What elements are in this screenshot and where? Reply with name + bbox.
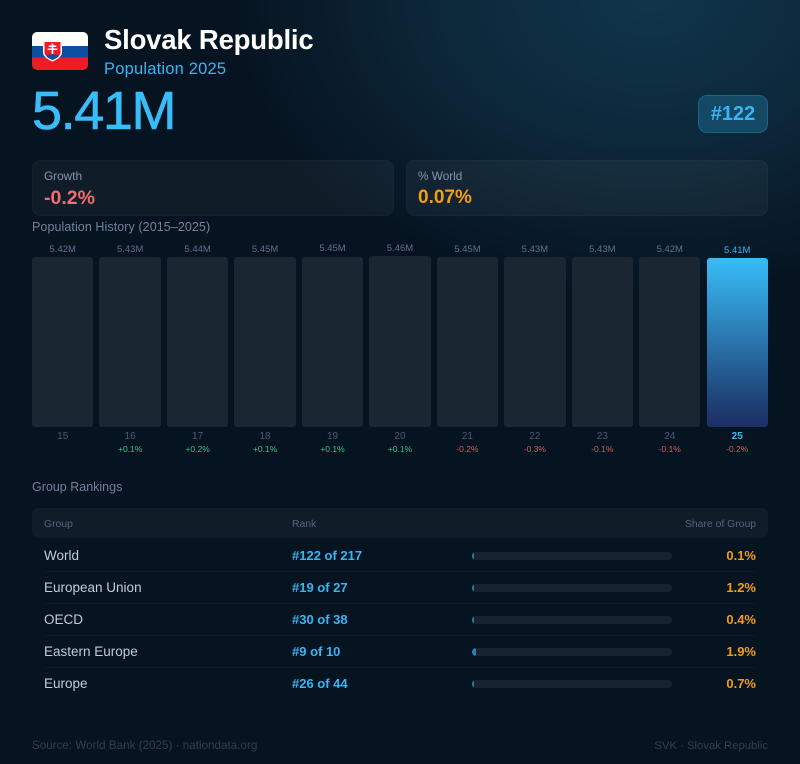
- bar 2019: [302, 243, 363, 454]
- bar 2018: +0.1%: [253, 444, 277, 454]
- bar 2025 highlighted: 5.41M: [724, 245, 750, 256]
- bar 2024: -0.1%: [659, 444, 681, 454]
- bar 2017: +0.2%: [185, 444, 210, 454]
- row: European Union: 1.2%: [726, 580, 756, 595]
- bar 2018: [234, 244, 296, 454]
- bar 2023: 5.43M: [589, 244, 616, 255]
- bar 2016: 5.43M: [117, 244, 143, 255]
- row: European Union: #19 of 27: [292, 580, 348, 595]
- title: Slovak Republic: [104, 24, 313, 55]
- bar 2020: 5.46M: [387, 243, 413, 254]
- source footer: Source: World Bank (2025) · nationdata.org: [32, 739, 257, 752]
- headline population value: 5.41M: [32, 81, 175, 141]
- header: rank: Rank: [292, 519, 316, 530]
- row: Europe: Europe: [44, 676, 88, 691]
- row: OECD: OECD: [44, 612, 83, 627]
- bar 2022: -0.3%: [524, 444, 546, 454]
- bar 2023: 23: [597, 431, 608, 442]
- percent of world value: 0.07%: [418, 187, 472, 208]
- row: World: 0.1%: [726, 548, 756, 563]
- bar 2020: 20: [394, 431, 406, 442]
- bar 2016: 16: [125, 431, 136, 442]
- row: Eastern Europe: [44, 636, 756, 668]
- bar 2016: [99, 244, 161, 454]
- bar 2015: 5.42M: [50, 244, 76, 255]
- bar 2017: 5.44M: [184, 244, 211, 255]
- bar 2023: [572, 244, 633, 454]
- row: Eastern Europe: Eastern Europe: [44, 644, 138, 659]
- header: group: Group: [44, 519, 73, 530]
- bar 2021: 21: [462, 431, 473, 442]
- bar 2019: 5.45M: [319, 243, 346, 254]
- percent of world label: % World: [418, 169, 462, 183]
- bar 2023: -0.1%: [591, 444, 613, 454]
- row: OECD: #30 of 38: [292, 612, 348, 627]
- bar 2018: 18: [260, 431, 271, 442]
- bar 2022: 5.43M: [522, 244, 548, 255]
- bar 2025 highlighted: -0.2%: [726, 444, 748, 454]
- chart heading: Population History (2015–2025): [32, 220, 210, 234]
- bar 2024: [639, 244, 700, 454]
- table header: [32, 508, 768, 538]
- bar 2020: [369, 243, 431, 454]
- row: European Union: [44, 572, 756, 604]
- bar 2019: 19: [327, 431, 338, 442]
- header: share of group: Share of Group: [685, 519, 756, 530]
- row: Europe: [44, 676, 756, 691]
- rankings table: [32, 508, 768, 691]
- bar 2021: -0.2%: [456, 444, 479, 454]
- bar 2015: [32, 244, 93, 442]
- row: OECD: 0.4%: [726, 612, 756, 627]
- bar 2017: 17: [192, 431, 203, 442]
- flag: Slovakia: [32, 32, 88, 70]
- row: Europe: 0.7%: [726, 676, 756, 691]
- row: OECD: [44, 604, 756, 636]
- bar 2024: 24: [664, 431, 675, 442]
- bar 2021: 5.45M: [454, 244, 481, 255]
- bar 2021: [437, 244, 498, 454]
- bar 2022: 22: [529, 431, 540, 442]
- bar 2025 highlighted: [707, 245, 768, 454]
- growth label: Growth: [44, 169, 82, 183]
- panel: growth: [32, 160, 394, 216]
- row: European Union: European Union: [44, 580, 142, 595]
- row: Europe: #26 of 44: [292, 676, 348, 691]
- growth value: -0.2%: [44, 187, 95, 209]
- bar chart: population history: [32, 243, 768, 454]
- bar 2018: 5.45M: [252, 244, 278, 255]
- panel: percent of world: [406, 160, 768, 216]
- row: Eastern Europe: #9 of 10: [292, 644, 340, 659]
- bar 2019: +0.1%: [320, 444, 345, 454]
- world rank badge: #122: [711, 103, 755, 125]
- country code footer: SVK · Slovak Republic: [654, 740, 768, 752]
- row: World: #122 of 217: [292, 548, 362, 563]
- bar 2024: 5.42M: [657, 244, 683, 255]
- bar 2025 highlighted: 25: [732, 431, 743, 442]
- rankings heading: Group Rankings: [32, 480, 122, 494]
- row: World: World: [44, 548, 79, 563]
- row: Eastern Europe: 1.9%: [726, 644, 756, 659]
- world rank badge: [698, 95, 768, 133]
- bar 2022: [504, 244, 566, 454]
- bar 2020: +0.1%: [388, 444, 412, 454]
- bar 2017: [167, 244, 228, 454]
- row: World: [44, 540, 756, 572]
- bar 2016: +0.1%: [118, 444, 142, 454]
- bar 2015: 15: [57, 431, 68, 442]
- subtitle: Population 2025: [104, 60, 226, 78]
